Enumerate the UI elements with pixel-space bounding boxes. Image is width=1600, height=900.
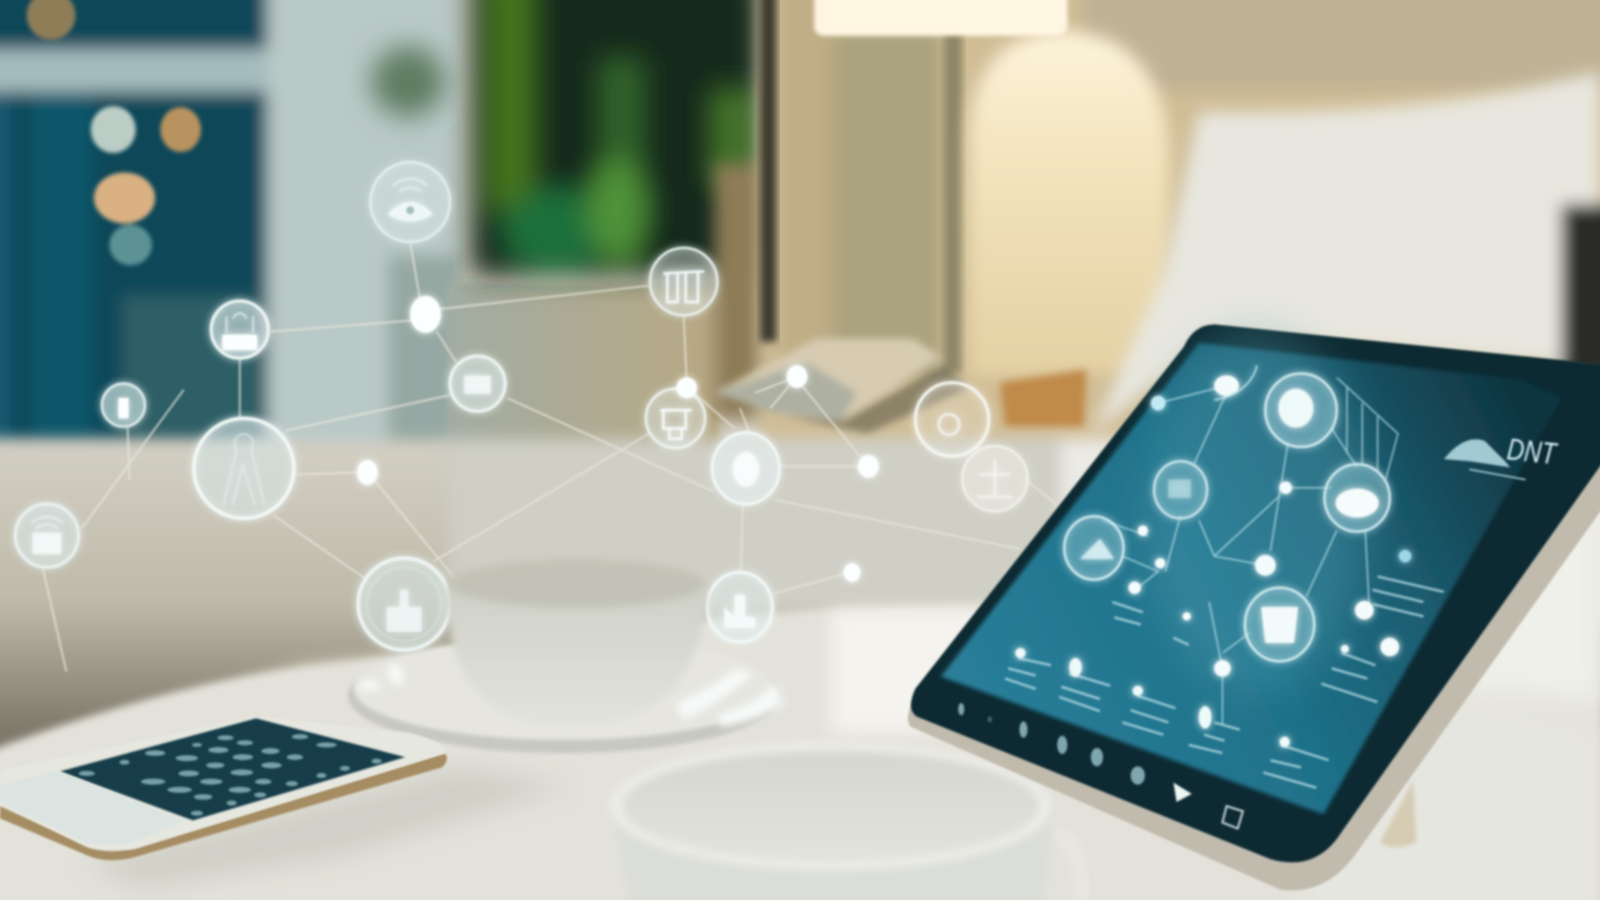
floating node: wifi device [15,504,79,567]
screen node: gear [1154,461,1207,518]
saucer [348,638,781,753]
dark door edge [760,0,777,342]
floating node: dial [915,383,989,456]
cup rim [609,742,1052,870]
screen node: top leaf [1151,365,1257,410]
cup interior [622,751,1039,861]
floating dot upper [677,378,697,398]
screen node: house [1064,516,1123,580]
tablet bottom controls [958,703,1243,829]
wall and lamp column [714,0,1600,449]
floating dots right [787,365,879,582]
phone body [0,716,446,851]
screen caption bars [1005,577,1444,788]
floating node: package [358,558,450,650]
cup handle [1051,832,1083,900]
saucer highlights [358,661,784,727]
silver frame [908,324,1600,891]
floating dot left [357,460,378,485]
shelf below the plant [449,284,719,457]
phone keys [79,734,382,816]
screen node: cloud [1324,464,1390,532]
lamp shade [814,0,1067,36]
floating node: router [211,301,268,358]
window with teal glass [0,0,461,449]
foreground cup [609,742,1083,900]
floating node: appliance [646,389,705,448]
screen caption dots [1015,645,1349,747]
floating hub dot [410,296,441,333]
black bezel [911,324,1600,862]
floating node: device [450,356,505,411]
green plant [371,0,762,276]
floating node: tree icon [962,446,1028,511]
cup body [447,559,706,727]
network lines [43,243,1077,671]
lamp glow [969,31,1169,378]
phone shadow [82,767,571,888]
screen glow [1143,327,1367,694]
phone [0,716,571,888]
bokeh lights [27,0,201,265]
center cup and saucer [348,559,784,753]
floating node: factory [707,572,772,642]
play button [1173,783,1192,802]
book and orange object behind [714,339,1087,434]
tablet [908,324,1600,891]
floating node: panels [650,248,717,315]
floating node: large sensor [194,418,294,518]
screen lines [1102,378,1398,724]
white table surface [0,510,1600,900]
lamp stem [944,31,962,372]
phone light panel [0,770,185,844]
logo: DNT [1505,432,1559,471]
tablecloth [0,439,1600,760]
cup body [612,806,1053,900]
screen node: top circle [1265,373,1337,447]
phone edge [0,753,447,860]
screen [941,343,1561,814]
logo [1444,432,1559,480]
floating node: small door [102,384,145,427]
phone screen [60,718,405,820]
stand leg [1380,781,1416,847]
screen bright dots [1129,482,1411,677]
screen node: page [1245,588,1314,661]
floating node: cloud eye [370,162,450,242]
floating node: bright light [712,433,780,504]
pillow [1092,71,1600,434]
